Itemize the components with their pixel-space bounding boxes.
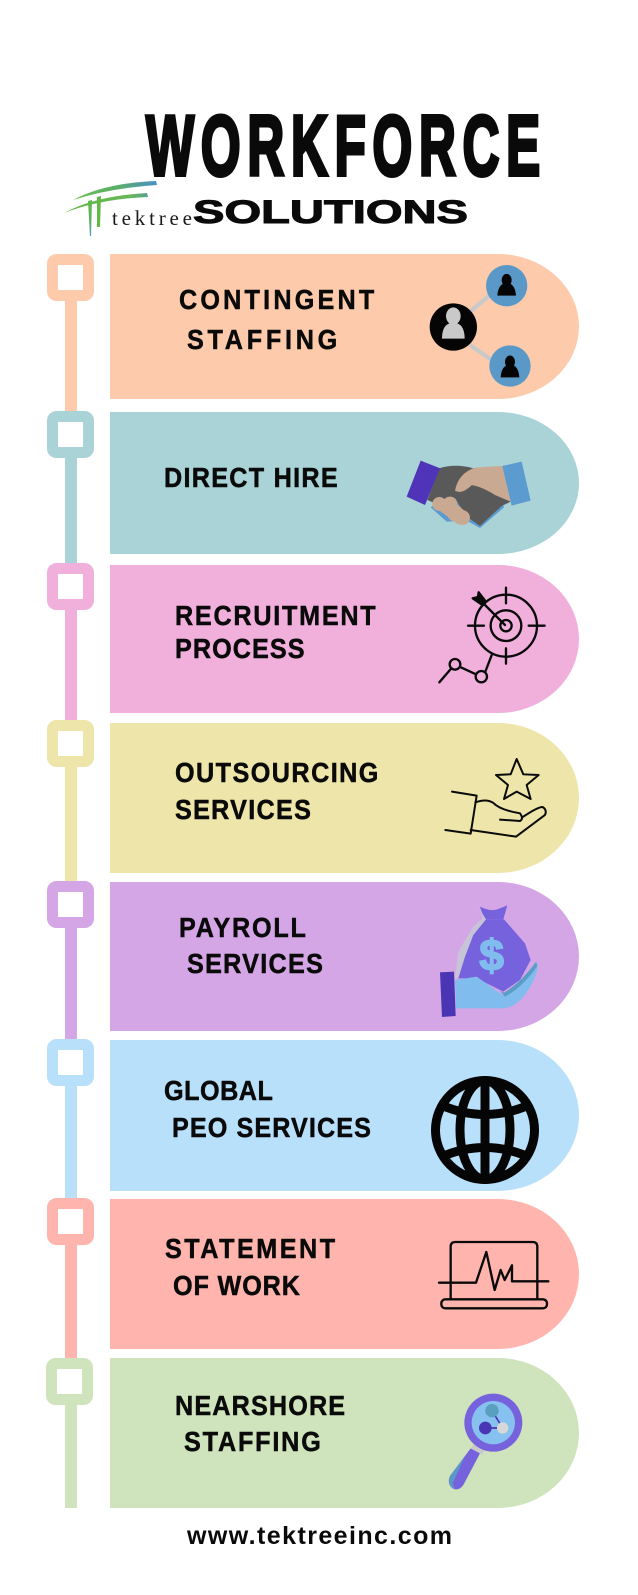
title: WORKFORCE: WORKFORCE bbox=[146, 99, 540, 193]
label: contingent staffing: STAFFING bbox=[187, 324, 337, 355]
panel: contingent staffing bbox=[110, 254, 579, 399]
label: recruitment process: PROCESS bbox=[175, 633, 305, 664]
label: statement of work: STATEMENT bbox=[165, 1233, 335, 1264]
label: direct hire: DIRECT HIRE bbox=[164, 462, 338, 493]
label: global peo services: PEO SERVICES bbox=[172, 1112, 371, 1143]
icon: money bag on hand bbox=[440, 905, 538, 1017]
icon: handshake bbox=[407, 461, 531, 528]
logo: tektree: tektree bbox=[112, 206, 192, 230]
logo: tektree bbox=[64, 181, 192, 236]
icon: people network bbox=[430, 265, 531, 387]
subtitle: SOLUTIONS: SOLUTIONS bbox=[193, 194, 468, 230]
panel: direct hire bbox=[110, 412, 579, 554]
icon: money bag on hand: $ bbox=[479, 932, 504, 981]
label: nearshore staffing bbox=[175, 1390, 345, 1457]
label: recruitment process bbox=[175, 600, 376, 664]
panel: recruitment process bbox=[110, 565, 579, 713]
label: payroll services: PAYROLL bbox=[179, 912, 306, 943]
label: outsourcing services: OUTSOURCING bbox=[175, 757, 378, 788]
label: payroll services: SERVICES bbox=[187, 948, 323, 979]
panel: outsourcing services bbox=[110, 723, 579, 873]
label: outsourcing services: SERVICES bbox=[175, 794, 311, 825]
panel: payroll services bbox=[110, 882, 579, 1031]
timeline connector: rods and square nodes bbox=[52, 260, 88, 1508]
label: recruitment process: RECRUITMENT bbox=[175, 600, 376, 631]
label: contingent staffing: CONTINGENT bbox=[179, 284, 374, 315]
label: outsourcing services bbox=[175, 757, 378, 825]
label: global peo services bbox=[164, 1075, 371, 1143]
icon: hand holding star bbox=[445, 759, 546, 837]
footer: website: www.tektreeinc.com bbox=[186, 1522, 452, 1550]
label: statement of work bbox=[165, 1233, 335, 1301]
label: payroll services bbox=[179, 912, 323, 979]
icon: globe bbox=[436, 1080, 534, 1180]
label: contingent staffing bbox=[179, 284, 374, 355]
icon: magnifying glass with network bbox=[449, 1394, 522, 1489]
label: nearshore staffing: NEARSHORE bbox=[175, 1390, 345, 1421]
panel: nearshore staffing bbox=[110, 1358, 579, 1508]
icon: laptop with pulse bbox=[439, 1242, 548, 1308]
label: global peo services: GLOBAL bbox=[164, 1075, 273, 1106]
label: statement of work: OF WORK bbox=[173, 1270, 300, 1301]
panel: global peo services bbox=[110, 1040, 579, 1191]
icon: target with arrow and trend line bbox=[439, 588, 545, 682]
label: nearshore staffing: STAFFING bbox=[184, 1426, 321, 1457]
panel: statement of work bbox=[110, 1199, 579, 1349]
